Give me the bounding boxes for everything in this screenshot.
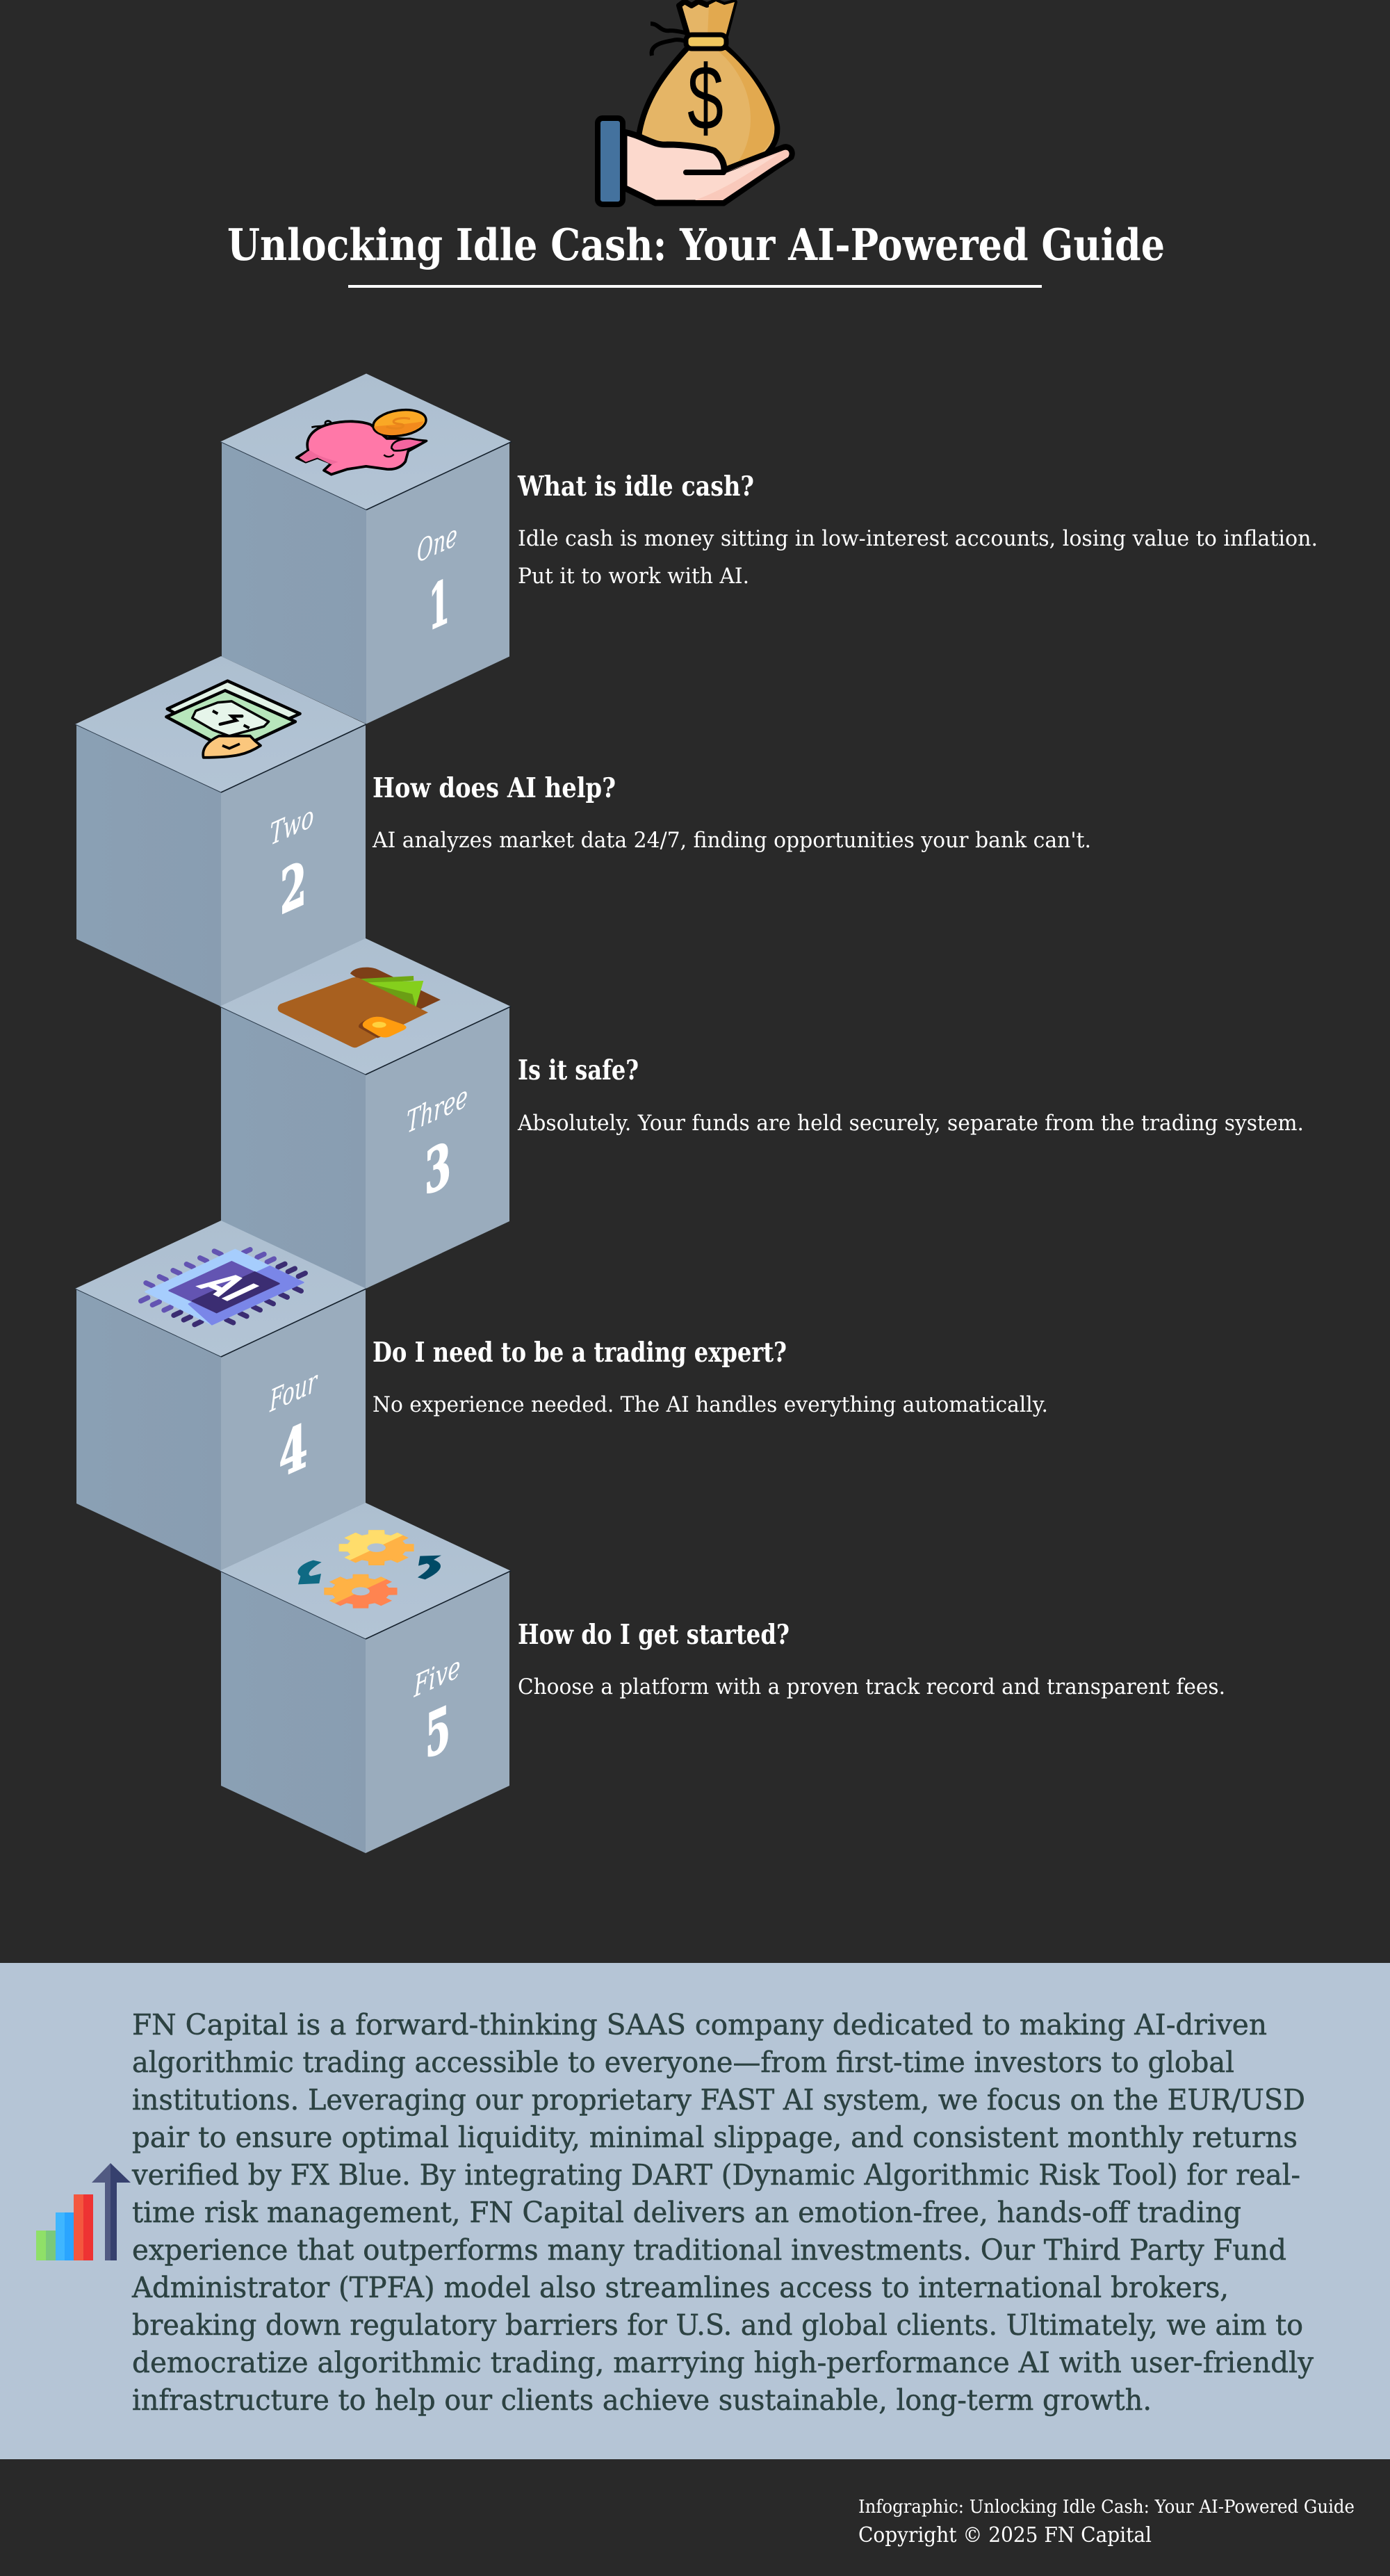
cube 1: what is idle cash: [220, 374, 512, 724]
cube 3: is it safe: Three: [407, 1078, 468, 1141]
step 4 text: Do I need to be a trading expert?: [373, 1337, 787, 1369]
footer credits: Infographic: Unlocking Idle Cash: Your AI-Powered Guide: [858, 2497, 1355, 2518]
company description paragraph: democratize algorithmic trading, marrying high-performance AI with user-friendly: [132, 2346, 1314, 2379]
step 5 text: How do I get started?: [518, 1619, 790, 1651]
icon: money bag in hand: $: [687, 47, 723, 149]
cube 2: how does AI help: Two: [270, 798, 313, 853]
step 2 text: AI analyzes market data 24/7, finding opportunities your bank can't.: [372, 828, 1091, 853]
icon: piggy bank: [297, 407, 427, 475]
step 1 text: Put it to work with AI.: [518, 564, 749, 589]
company description paragraph: verified by FX Blue. By integrating DART (Dynamic Algorithmic Risk Tool) for real-: [131, 2158, 1300, 2192]
title: Unlocking Idle Cash: Your AI-Powered Guide: [227, 219, 1165, 270]
company description paragraph: infrastructure to help our clients achieve sustainable, long-term growth.: [132, 2383, 1152, 2417]
cube 5: how do I get started: Five: [414, 1649, 461, 1705]
cube 2: how does AI help: 2: [280, 847, 306, 929]
icon: AI chip: AI: [185, 1267, 271, 1307]
step 3 text: Absolutely. Your funds are held securely, separate from the trading system.: [517, 1111, 1304, 1136]
cube 4: trading expert: Four: [269, 1362, 318, 1419]
step 5 text: [518, 1619, 1225, 1699]
company description paragraph: experience that outperforms many traditional investments. Our Third Party Fund: [132, 2233, 1286, 2267]
step 1 text: [517, 471, 1318, 589]
icon: money bag in hand: [598, 1, 792, 204]
icon: AI chip: [141, 1250, 305, 1325]
company description paragraph: time risk management, FN Capital delivers an emotion-free, hands-off trading: [132, 2196, 1241, 2229]
title underline: [348, 285, 1042, 288]
cube 4: trading expert: [75, 1221, 366, 1571]
step 1 text: Idle cash is money sitting in low-interest accounts, losing value to inflation.: [518, 526, 1318, 551]
cube 5: how do I get started: [220, 1503, 511, 1853]
company description paragraph: institutions. Leveraging our proprietary FAST AI system, we focus on the EUR/USD: [132, 2083, 1305, 2117]
step 3 text: Is it safe?: [518, 1054, 639, 1086]
company description paragraph: algorithmic trading accessible to everyone—from first-time investors to global: [132, 2046, 1234, 2079]
step 4 text: [373, 1337, 1048, 1417]
icon: growth bar chart with arrow: [36, 2163, 131, 2260]
panel: company description band: [0, 1963, 1390, 2459]
cube 5: how do I get started: 5: [425, 1692, 450, 1773]
cube 1: what is idle cash: 1: [429, 565, 450, 645]
icon: gears and arrows: [297, 1530, 441, 1608]
cube 3: is it safe: [220, 938, 511, 1289]
icon: wallet: [278, 968, 441, 1047]
step 1 text: What is idle cash?: [517, 471, 754, 503]
step 2 text: How does AI help?: [373, 772, 616, 804]
step 4 text: No experience needed. The AI handles everything automatically.: [373, 1392, 1048, 1417]
footer credits: Copyright © 2025 FN Capital: [858, 2523, 1152, 2548]
company description paragraph: Administrator (TPFA) model also streamlines access to international brokers,: [131, 2271, 1229, 2304]
company description paragraph: FN Capital is a forward-thinking SAAS company dedicated to making AI-driven: [132, 2008, 1267, 2041]
company description paragraph: breaking down regulatory barriers for U.S. and global clients. Ultimately, we aim to: [132, 2308, 1303, 2342]
cube 3: is it safe: 3: [425, 1128, 451, 1210]
step 3 text: [517, 1054, 1304, 1136]
cube 4: trading expert: 4: [279, 1410, 307, 1492]
cube 1: what is idle cash: One: [417, 517, 457, 570]
company description paragraph: [131, 2008, 1314, 2417]
step 2 text: [372, 772, 1091, 853]
company description paragraph: pair to ensure optimal liquidity, minimal slippage, and consistent monthly returns: [132, 2121, 1298, 2154]
cube 2: how does AI help: [75, 656, 366, 1006]
step 5 text: Choose a platform with a proven track record and transparent fees.: [518, 1674, 1225, 1699]
icon: banknote and hand: [166, 681, 300, 758]
footer credits: [858, 2497, 1355, 2548]
